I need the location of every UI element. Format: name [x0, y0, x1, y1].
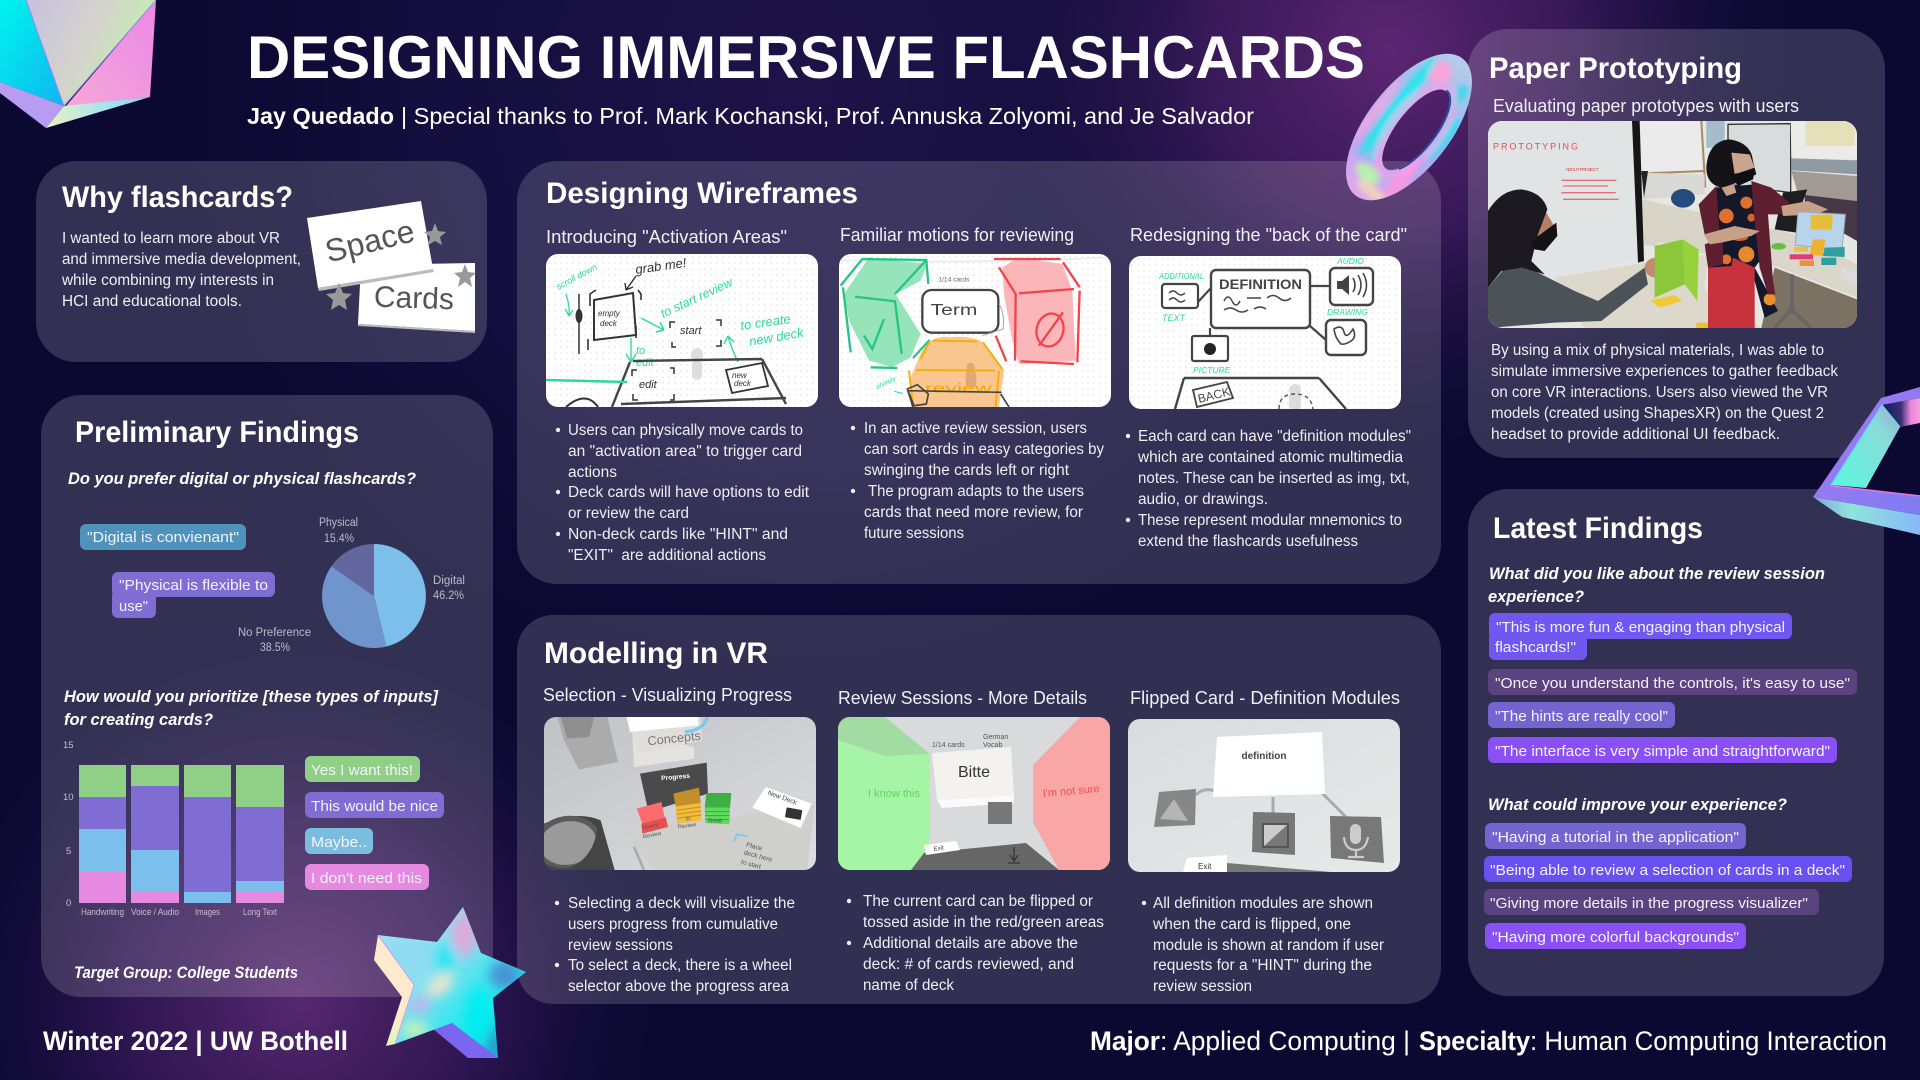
image: vr selection scene: Place — [745, 842, 763, 853]
image: vr review scene: Exit — [933, 845, 945, 853]
quote: digital is convenient: "Digital is convienant" — [87, 530, 239, 546]
image: vr selection scene: In — [686, 816, 690, 822]
sketch: activation areas: deck — [734, 379, 752, 388]
sketch: activation areas: edit — [639, 379, 658, 391]
image: vr review scene: I know this — [868, 788, 920, 800]
photo: two people testing prototypes — [1488, 121, 1857, 328]
heading: why flashcards: Why flashcards? — [62, 181, 293, 214]
icon: iridescent frame — [1813, 387, 1920, 535]
question: what did you like: What did you like about the review session — [1489, 565, 1825, 583]
question: what did you like: experience? — [1488, 588, 1584, 606]
question: what could improve: What could improve your experience? — [1488, 796, 1787, 814]
quote: progress visualizer: "Giving more details in the progress visualizer" — [1490, 896, 1808, 912]
pie chart: 46.2% — [433, 590, 464, 602]
text: why flashcards body: while combining my interests in — [61, 272, 274, 289]
sketch: familiar motions — [839, 254, 1111, 407]
sketch: definition modules: DEFINITION — [1219, 276, 1302, 292]
question: prioritize inputs: How would you prioritize [these types of inputs] — [64, 688, 439, 706]
sketch: familiar motions: review — [925, 381, 993, 395]
text: flipped card bullets: requests for a "HINT" during the — [1153, 957, 1372, 974]
sketch: definition modules: AUDIO — [1336, 256, 1364, 266]
sketch: activation areas: grab me! — [634, 255, 688, 277]
image: vr definition modules scene — [1128, 719, 1400, 872]
quote: colorful backgrounds: "Having more colorful backgrounds" — [1492, 930, 1739, 946]
text: paper prototyping body: By using a mix of physical materials, I was able to — [1491, 342, 1824, 359]
panel: why flashcards — [36, 161, 487, 362]
legend: This would be nice — [311, 799, 438, 815]
text: activation bullets: or review the card — [568, 505, 689, 522]
image: vr selection scene: Good — [708, 818, 722, 824]
text: definition bullets: Each card can have "definition modules" — [1138, 428, 1411, 445]
quote: digital is convenient — [80, 524, 246, 550]
text: flipped card bullets: All definition modules are shown — [1153, 895, 1373, 912]
quote: hints — [1488, 702, 1675, 728]
text: why flashcards body — [61, 230, 301, 310]
footer: major and specialty: Specialty — [1419, 1026, 1530, 1056]
image: vr selection scene: New Deck — [767, 790, 798, 807]
title: DESIGNING IMMERSIVE FLASHCARDS — [247, 24, 1365, 91]
question: prioritize inputs — [64, 688, 439, 729]
subtitle: | Special thanks to Prof. Mark Kochanski, Prof. Annuska Zolyomi, and Je Salvador — [401, 103, 1254, 129]
text: review bullets: swinging the cards left or right — [864, 462, 1070, 479]
text: flipped card bullets: when the card is flipped, one — [1152, 916, 1351, 933]
quote: progress visualizer — [1484, 889, 1819, 915]
quote: tutorial — [1485, 823, 1746, 849]
quote: colorful backgrounds — [1485, 923, 1746, 949]
legend: Maybe.. — [311, 835, 367, 851]
panel: preliminary findings — [41, 395, 493, 997]
image: vr review scene — [838, 717, 1110, 870]
sketch: definition modules: DRAWING — [1327, 307, 1368, 317]
text: selection bullets: selector above the progress area — [568, 978, 789, 995]
text: review session bullets: tossed aside in the red/green areas — [863, 914, 1104, 931]
text: review session bullets: The current card can be flipped or — [863, 893, 1093, 910]
quote: more fun: "This is more fun & engaging than physical — [1496, 620, 1785, 636]
subheading: selection: Selection - Visualizing Progress — [543, 685, 792, 705]
subheading: review sessions: Review Sessions - More Details — [838, 688, 1087, 708]
image: vr definition modules scene: definition — [1242, 751, 1286, 762]
stacked bar chart — [63, 740, 284, 918]
sketch: definition modules: ADDITIONAL — [1158, 271, 1204, 281]
heading: modelling in vr: Modelling in VR — [544, 637, 768, 670]
subheading: back of the card: Redesigning the "back of the card" — [1130, 225, 1407, 245]
quote: selection of cards: "Being able to review a selection of cards in a deck" — [1490, 863, 1845, 879]
text: review bullets: cards that need more review, for — [864, 504, 1083, 521]
image: vr selection scene: Concepts — [647, 729, 701, 748]
text: activation bullets: Deck cards will have options to edit — [568, 484, 810, 501]
quote: easy to use — [1488, 669, 1857, 695]
panel: latest findings — [1468, 489, 1884, 996]
image: vr review scene: 1/14 cards — [932, 742, 965, 749]
footer: term and school: Winter 2022 | UW Bothell — [43, 1026, 348, 1056]
text: definition bullets: These represent modular mnemonics to — [1138, 512, 1402, 529]
panel: modelling in vr — [517, 615, 1441, 1004]
text: selection bullets: Selecting a deck will visualize the — [568, 895, 795, 912]
legend: Yes I want this! — [311, 763, 413, 779]
legend: I don't need this — [311, 871, 422, 887]
pie chart — [238, 517, 465, 654]
quote: more fun: flashcards!" — [1495, 640, 1576, 656]
text: review bullets: In an active review session, users — [864, 420, 1087, 437]
sketch: familiar motions: e/vitaly — [875, 375, 898, 391]
sketch: activation areas: empty — [598, 309, 621, 318]
heading: paper prototyping: Paper Prototyping — [1489, 52, 1742, 85]
text: activation bullets: actions — [568, 464, 617, 481]
text: activation bullets — [556, 422, 810, 564]
sketch: activation areas: to — [636, 345, 645, 357]
sketch: activation areas: start — [680, 325, 702, 337]
text: selection bullets — [555, 895, 795, 995]
pie chart: 38.5% — [260, 642, 290, 654]
panel: paper prototyping — [1468, 29, 1885, 458]
sketch: activation areas: to create — [739, 311, 792, 333]
quote: interface: "The interface is very simple and straightforward" — [1495, 744, 1830, 760]
text: paper prototyping body: simulate immersive experiences to gather feedback — [1491, 363, 1838, 380]
text: review session bullets: name of deck — [863, 977, 954, 994]
icon: space cards: Cards — [373, 281, 455, 316]
sketch: activation areas: to start review — [658, 275, 736, 321]
text: activation bullets: Users can physically move cards to — [568, 422, 803, 439]
text: definition bullets: notes. These can be inserted as img, txt, — [1138, 470, 1410, 487]
subheading: activation areas: Introducing "Activation Areas" — [546, 227, 787, 247]
quote: physical is flexible: use" — [119, 599, 148, 615]
quote: physical is flexible: "Physical is flexible to — [119, 578, 268, 594]
text: definition bullets — [1126, 428, 1411, 550]
panel: designing wireframes — [517, 161, 1441, 584]
image: vr review scene: I'm not sure — [1042, 783, 1100, 800]
pie chart: Physical — [319, 517, 358, 529]
footer: major and specialty: : Applied Computing | — [1160, 1026, 1410, 1056]
sketch: activation areas — [546, 254, 818, 407]
text: flipped card bullets — [1142, 895, 1384, 995]
image: vr selection scene: Review — [677, 822, 698, 831]
sketch: definition modules: PICTURE — [1193, 365, 1231, 375]
image: vr selection scene: Progress — [661, 773, 691, 782]
text: definition bullets: which are contained atomic multimedia — [1137, 449, 1403, 466]
text: activation bullets: "EXIT" are additional actions — [568, 547, 766, 564]
text: activation bullets: an "activation area" to trigger card — [568, 443, 802, 460]
icon: iridescent star — [374, 907, 526, 1063]
right person — [1699, 139, 1828, 318]
stacked bar chart: Images — [195, 907, 220, 918]
subheading: flipped card: Flipped Card - Definition Modules — [1130, 688, 1400, 708]
text: paper prototyping body: on core VR interactions. Users also viewed the VR — [1491, 384, 1828, 401]
quote: interface — [1488, 737, 1837, 763]
stacked bar chart: Long Text — [243, 907, 277, 918]
sketch: definition modules — [1129, 256, 1401, 409]
image: vr selection scene — [530, 717, 816, 873]
text: review bullets: The program adapts to the users — [868, 483, 1084, 500]
footer: major and specialty: Major — [1090, 1026, 1160, 1056]
question: digital or physical: Do you prefer digital or physical flashcards? — [68, 470, 416, 488]
text: selection bullets: To select a deck, there is a wheel — [568, 957, 792, 974]
quote: more fun — [1489, 613, 1792, 660]
stacked bar chart: Voice / Audio — [131, 907, 179, 918]
image: vr selection scene: Needs — [642, 822, 659, 832]
image: vr review scene: Vocab — [983, 742, 1003, 749]
sketch: activation areas: deck — [600, 319, 618, 328]
left person — [1488, 189, 1676, 328]
sketch: activation areas: scroll down — [554, 262, 599, 292]
sketch: definition modules: BACK — [1196, 384, 1231, 406]
text: review session bullets: Additional details are above the — [863, 935, 1078, 952]
footer: major and specialty: : Human Computing Interaction — [1530, 1026, 1887, 1056]
text: why flashcards body: and immersive media development, — [62, 251, 301, 268]
pie chart: Digital — [433, 575, 465, 587]
image: vr selection scene: to start — [740, 859, 762, 871]
icon: space cards — [307, 201, 476, 333]
sketch: definition modules: TEXT — [1162, 313, 1187, 323]
text: definition bullets: extend the flashcards usefulness — [1138, 533, 1358, 550]
sketch: activation areas: edit — [636, 357, 655, 369]
heading: preliminary findings: Preliminary Findings — [75, 416, 359, 449]
text: activation bullets: Non-deck cards like "HINT" and — [568, 526, 788, 543]
icon: space cards: Space — [321, 213, 418, 269]
text: paper prototyping body: models (created using ShapesXR) on the Quest 2 — [1491, 405, 1824, 422]
text: flipped card bullets: review session — [1153, 978, 1252, 995]
stacked bar chart: 15 — [63, 740, 74, 751]
icon: iridescent ring — [1346, 54, 1472, 200]
icon: iridescent gem — [0, 0, 156, 128]
pie chart: 15.4% — [324, 533, 354, 545]
quote: hints: "The hints are really cool" — [1495, 709, 1668, 725]
quote: physical is flexible — [112, 572, 275, 618]
text: paper prototyping body — [1491, 342, 1838, 443]
image: vr selection scene: Review — [643, 831, 663, 841]
image: vr selection scene: deck here — [743, 850, 773, 864]
stacked bar chart: 10 — [63, 792, 74, 803]
question: what did you like — [1488, 565, 1825, 606]
text: selection bullets: users progress from cumulative — [568, 916, 778, 933]
sketch: familiar motions: Term — [931, 302, 977, 319]
legend — [305, 756, 444, 890]
image: vr review scene: Bitte — [958, 764, 990, 781]
quote: easy to use: "Once you understand the controls, it's easy to use" — [1495, 676, 1850, 692]
photo: two people testing prototypes: ABOUT PROJECT — [1565, 167, 1599, 173]
image: vr review scene: German — [983, 734, 1008, 741]
text: why flashcards body: HCI and educational tools. — [62, 293, 242, 310]
question: prioritize inputs: for creating cards? — [64, 711, 213, 729]
stacked bar chart: 5 — [66, 846, 71, 857]
text: review bullets — [851, 420, 1104, 542]
text: definition bullets: audio, or drawings. — [1138, 491, 1268, 508]
sketch: activation areas: new deck — [748, 324, 806, 349]
quote: tutorial: "Having a tutorial in the application" — [1492, 830, 1739, 846]
text: flipped card bullets: module is shown at random if user — [1153, 937, 1384, 954]
text: review bullets: future sessions — [864, 525, 964, 542]
text: paper prototyping body: headset to provide additional UI feedback. — [1491, 426, 1780, 443]
subtitle: Jay Quedado — [247, 103, 394, 129]
text: why flashcards body: I wanted to learn more about VR — [62, 230, 280, 247]
photo: two people testing prototypes: PROTOTYPING — [1493, 141, 1578, 151]
caption: target group: Target Group: College Students — [74, 964, 298, 982]
stacked bar chart: 0 — [66, 898, 71, 909]
text: review session bullets: deck: # of cards reviewed, and — [863, 956, 1074, 973]
heading: latest findings: Latest Findings — [1493, 512, 1703, 545]
subheading: familiar motions: Familiar motions for reviewing — [840, 225, 1074, 245]
sketch: familiar motions: 1/14 cards — [938, 276, 970, 283]
quote: selection of cards — [1484, 856, 1852, 882]
footer: major and specialty — [1090, 1026, 1887, 1056]
heading: designing wireframes: Designing Wireframes — [546, 177, 858, 210]
text: selection bullets: review sessions — [568, 937, 673, 954]
pie chart: No Preference — [238, 627, 311, 639]
subheading: evaluating: Evaluating paper prototypes with users — [1493, 96, 1799, 116]
text: review session bullets — [847, 893, 1104, 994]
text: review bullets: can sort cards in easy categories by — [864, 441, 1104, 458]
stacked bar chart: Handwriting — [81, 907, 124, 918]
sketch: activation areas: new — [732, 371, 748, 380]
image: vr definition modules scene: Exit — [1198, 862, 1212, 871]
